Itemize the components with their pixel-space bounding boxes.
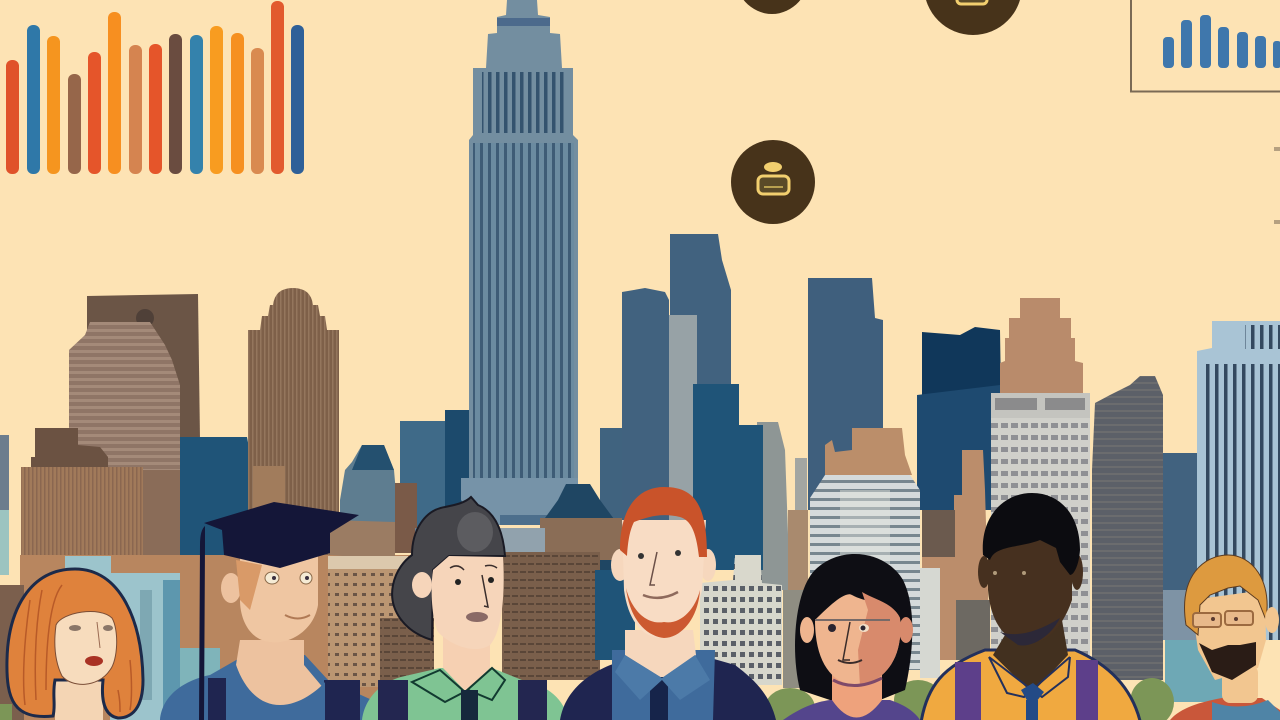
icon: top circle right — [924, 0, 1022, 35]
landmark tower — [461, 0, 578, 525]
icon: top circle left — [734, 0, 810, 14]
skyline: centre brown building — [500, 484, 635, 680]
person: woman with dark hair — [362, 497, 568, 720]
panel: framed bar chart — [1131, 0, 1280, 92]
skyline: left back buildings — [0, 288, 469, 620]
person: graduate — [160, 502, 372, 720]
person: red-haired man — [560, 487, 776, 720]
bar chart: left — [6, 1, 304, 174]
person: woman with glasses — [783, 554, 920, 720]
person: man with beard and glasses — [1170, 555, 1280, 720]
trees — [0, 678, 1174, 720]
skyline: right buildings — [917, 298, 1280, 702]
skyline: tan and white mid buildings — [700, 428, 990, 688]
person: woman with orange bob — [7, 569, 143, 720]
axis ticks: right edge — [1274, 147, 1280, 224]
skyline: centre blue buildings — [600, 234, 883, 595]
icon: centre circle — [731, 140, 815, 224]
skyline: lower left buildings — [0, 520, 455, 720]
person: dark-skinned man in yellow shirt — [920, 493, 1142, 720]
